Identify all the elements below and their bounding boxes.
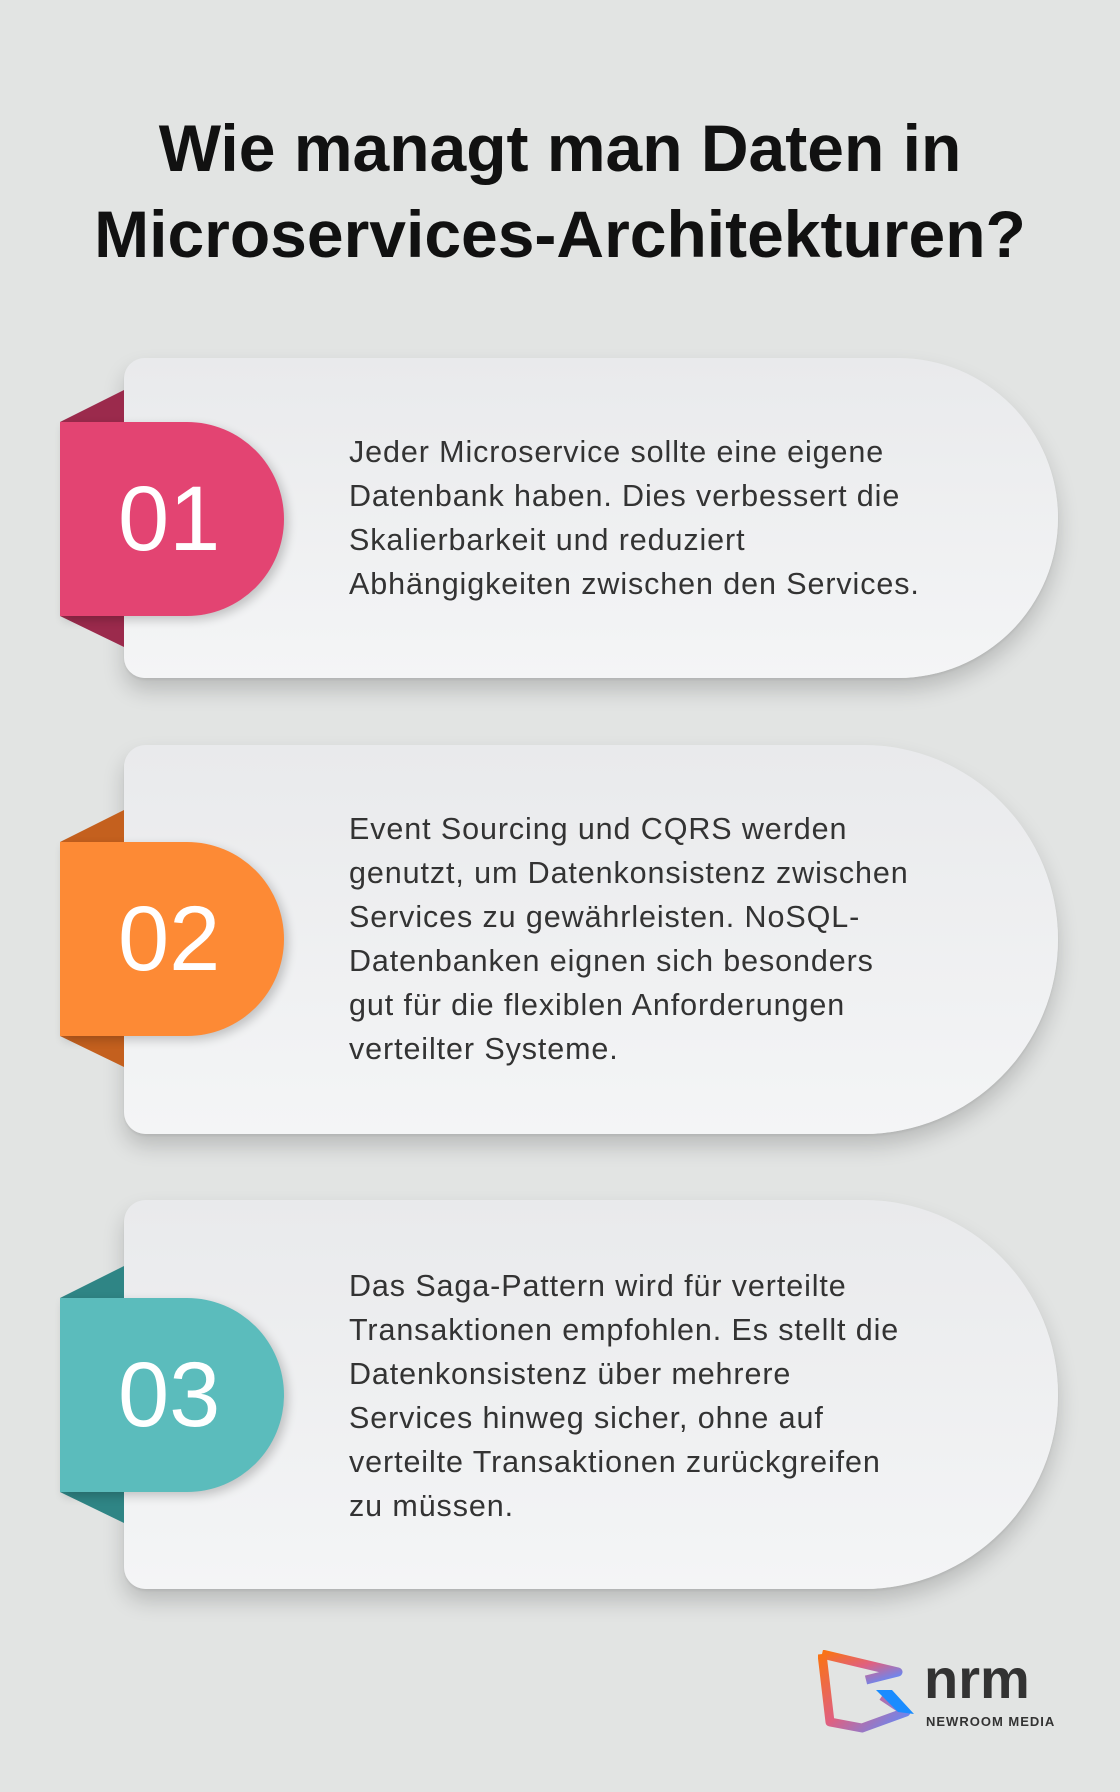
- text 2: genutzt, um Datenkonsistenz zwischen: [349, 856, 909, 890]
- card 3: [124, 1200, 1058, 1589]
- text 3: [349, 1269, 899, 1523]
- logo: NEWROOM MEDIA: [926, 1714, 1055, 1729]
- logo: [818, 1647, 1055, 1732]
- badge 01: 01: [118, 468, 220, 570]
- text 2: gut für die flexiblen Anforderungen: [349, 988, 845, 1022]
- text 2: Event Sourcing und CQRS werden: [349, 812, 847, 846]
- folds 3: [60, 1266, 124, 1523]
- badge 02: [60, 842, 284, 1036]
- text 1: Datenbank haben. Dies verbessert die: [349, 479, 900, 513]
- text 3: Das Saga-Pattern wird für verteilte: [349, 1269, 847, 1303]
- panel: step 1: [60, 358, 1067, 699]
- icon: nrm mark: [818, 1650, 914, 1732]
- text 1: Jeder Microservice sollte eine eigene: [349, 435, 884, 469]
- text 3: verteilte Transaktionen zurückgreifen: [349, 1445, 881, 1479]
- panel: step 2: [60, 745, 1067, 1155]
- card 2: [124, 745, 1058, 1134]
- text 2: Datenbanken eignen sich besonders: [349, 944, 874, 978]
- card 1: [124, 358, 1058, 678]
- text 1: Skalierbarkeit und reduziert: [349, 523, 745, 557]
- title: [94, 111, 1026, 271]
- text 1: [349, 435, 920, 601]
- title: Microservices-Architekturen?: [94, 197, 1026, 271]
- panel: step 3: [60, 1200, 1067, 1610]
- text 2: Services zu gewährleisten. NoSQL-: [349, 900, 860, 934]
- text 3: Transaktionen empfohlen. Es stellt die: [349, 1313, 899, 1347]
- badge 01: [60, 422, 284, 616]
- text 3: Services hinweg sicher, ohne auf: [349, 1401, 824, 1435]
- logo text: nrm: [924, 1647, 1030, 1710]
- text 3: zu müssen.: [349, 1489, 514, 1523]
- text 1: Abhängigkeiten zwischen den Services.: [349, 567, 920, 601]
- folds 1: [60, 390, 124, 647]
- title: Wie managt man Daten in: [159, 111, 961, 185]
- badge 02: 02: [118, 888, 220, 990]
- badge 03: 03: [118, 1344, 220, 1446]
- text 3: Datenkonsistenz über mehrere: [349, 1357, 791, 1391]
- folds 2: [60, 810, 124, 1067]
- text 2: [349, 812, 909, 1066]
- badge 03: [60, 1298, 284, 1492]
- text 2: verteilter Systeme.: [349, 1032, 619, 1066]
